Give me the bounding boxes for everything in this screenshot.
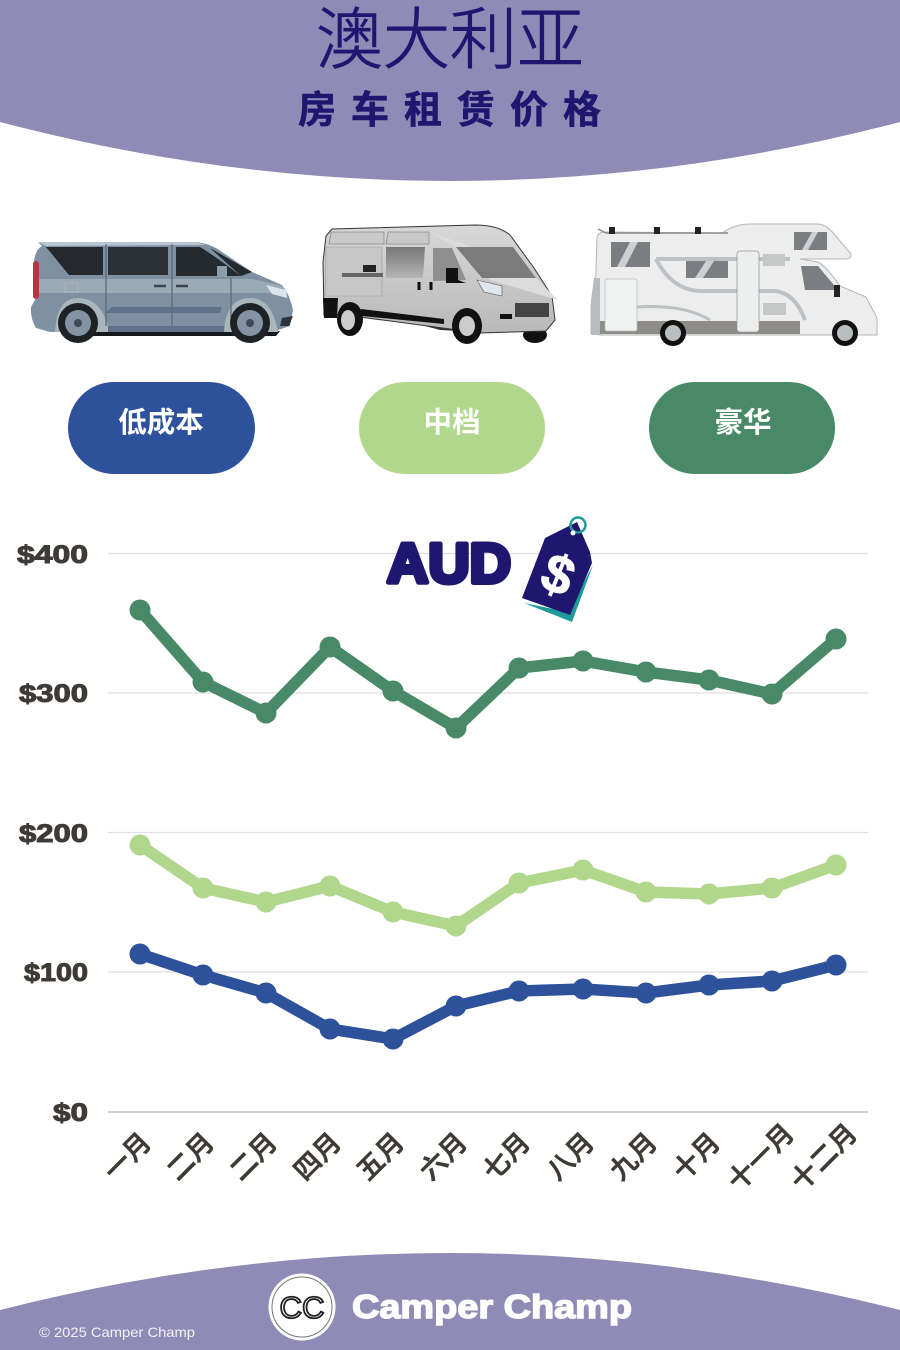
x-axis labels: 七月 (477, 1127, 536, 1186)
y-axis labels: $300 (19, 680, 88, 708)
x-axis labels: 十二月 (785, 1118, 863, 1197)
icon: price tag: $ (533, 542, 583, 608)
copyright: © 2025 Camper Champ (39, 1324, 195, 1340)
x-axis labels: 十月 (667, 1127, 726, 1186)
icon: luxury motorhome (591, 224, 877, 346)
header band (0, 0, 900, 181)
series: mid-range (130, 834, 846, 936)
brand name: Camper Champ (352, 1288, 632, 1325)
x-axis labels: 四月 (288, 1127, 347, 1186)
x-axis labels (98, 1118, 863, 1197)
x-axis labels: 一月 (98, 1127, 157, 1186)
badge: mid-range (359, 382, 545, 474)
icon: budget minivan (31, 242, 293, 343)
subtitle: 房车租赁价格 (298, 79, 616, 134)
x-axis labels: 二月 (224, 1127, 283, 1186)
line chart (17, 541, 868, 1197)
series: budget (130, 944, 846, 1050)
y-axis labels: $400 (17, 541, 88, 569)
badge: luxury: 豪华 (714, 407, 772, 439)
x-axis labels: 十一月 (722, 1118, 800, 1197)
footer band (0, 1253, 900, 1350)
logo badge (268, 1274, 336, 1340)
series: luxury (130, 600, 846, 738)
badge: luxury (649, 382, 835, 474)
badge: budget: 低成本 (118, 407, 204, 439)
badge: mid-range: 中档 (423, 407, 481, 439)
currency label: AUD: AUD (387, 532, 511, 594)
y-axis labels: $0 (53, 1099, 88, 1127)
x-axis labels: 八月 (541, 1127, 600, 1186)
x-axis labels: 五月 (351, 1127, 410, 1186)
x-axis labels: 九月 (604, 1127, 663, 1186)
y-axis labels (17, 541, 88, 1127)
badge: budget (68, 382, 255, 474)
x-axis labels: 六月 (414, 1127, 473, 1186)
y-axis labels: $200 (19, 820, 88, 848)
y-axis labels: $100 (24, 959, 88, 987)
icon: price tag (522, 518, 593, 622)
icon: mid-range van (323, 225, 558, 344)
logo badge: CC (280, 1290, 324, 1325)
x-axis labels: 二月 (161, 1127, 220, 1186)
